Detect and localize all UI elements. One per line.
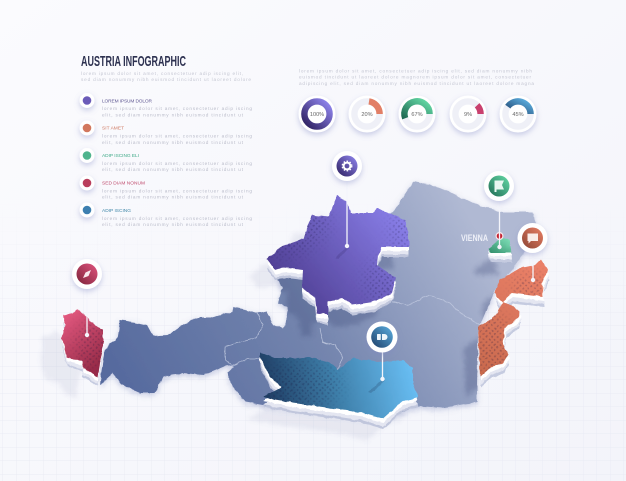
legend item: sed diam nonum: lorem ipsum dolor sit amet, consectetuer adip iscing bbox=[102, 188, 252, 193]
gauge: 100% bbox=[298, 96, 336, 132]
top paragraph: adipiscing elit, sed diam nonummy nibh euismod tincidunt ut laoreet dolore magna bbox=[299, 81, 534, 86]
gauge: 45% bbox=[500, 96, 536, 132]
internal borders bbox=[225, 295, 480, 370]
region: Carinthia bbox=[259, 352, 418, 429]
legend item: adip iscing: lorem ipsum dolor sit amet, consectetuer adip iscing bbox=[102, 216, 252, 221]
gauge: 45%: 45% bbox=[512, 112, 524, 118]
gauge: 67%: 67% bbox=[411, 112, 423, 118]
gauge: 100%: 100% bbox=[310, 112, 324, 118]
legend item: lorem ipsum dolor: lorem ipsum dolor sit amet, consectetuer adip iscing bbox=[102, 106, 252, 111]
gauge: 9%: 9% bbox=[464, 112, 472, 118]
legend item: sit amet: SIT AMET bbox=[102, 126, 124, 132]
pin: flag bbox=[484, 171, 514, 249]
pin: gear bbox=[332, 151, 362, 248]
intro text: sed diam nonummy nibh euismod tincidunt ut laoreet dolore bbox=[81, 77, 251, 82]
legend item: sit amet bbox=[80, 120, 252, 145]
region: greater Austria bbox=[100, 182, 537, 419]
intro text bbox=[81, 71, 251, 82]
gauges bbox=[298, 96, 536, 132]
legend item: adip iscing eli bbox=[80, 148, 252, 172]
pin: compass bbox=[72, 259, 102, 337]
top paragraph bbox=[299, 68, 534, 86]
region: Upper Austria bbox=[266, 195, 410, 326]
top paragraph: lorem ipsum dolor sit amet, consectetuer adip iscing elit, sed diam nonummy nibh bbox=[299, 68, 532, 73]
legend item: adip iscing: ADIP ISCING bbox=[102, 208, 131, 214]
legend item: lorem ipsum dolor: elit, sed diam nonummy nibh euismod tincidunt ut bbox=[102, 112, 244, 117]
legend item: sit amet: lorem ipsum dolor sit amet, consectetuer adip iscing bbox=[102, 134, 252, 139]
icon: flag bbox=[494, 180, 504, 192]
legend item: adip iscing eli: elit, sed diam nonummy nibh euismod tincidunt ut bbox=[102, 167, 244, 172]
icon: gear bbox=[342, 161, 352, 171]
legend item: sed diam nonum: SED DIAM NONUM bbox=[102, 180, 145, 186]
icon: compass needle bbox=[83, 270, 91, 278]
legend item: sed diam nonum: elit, sed diam nonummy nibh euismod tincidunt ut bbox=[102, 195, 244, 200]
legend item: lorem ipsum dolor: LOREM IPSUM DOLOR bbox=[102, 98, 153, 104]
map of Austria bbox=[40, 182, 555, 441]
gauge: 9% bbox=[450, 96, 486, 132]
gauge: 20% bbox=[348, 96, 386, 132]
title: AUSTRIA INFOGRAPHIC bbox=[81, 53, 186, 70]
legend bbox=[80, 93, 252, 227]
pin: film bbox=[366, 322, 398, 381]
region: Vorarlberg bbox=[61, 309, 104, 386]
legend item: sed diam nonum bbox=[80, 176, 252, 200]
legend item: sit amet: elit, sed diam nonummy nibh euismod tincidunt ut bbox=[102, 140, 244, 145]
ground long shadows bbox=[40, 214, 402, 441]
legend item: adip iscing eli: ADIP ISCING ELI bbox=[102, 153, 139, 159]
region: Vienna bbox=[488, 238, 512, 262]
intro text: lorem ipsum dolor sit amet, consectetuer adip iscing elit, bbox=[81, 71, 243, 76]
legend item: adip iscing eli: lorem ipsum dolor sit amet, consectetuer adip iscing bbox=[102, 161, 252, 166]
legend item: adip iscing bbox=[80, 202, 252, 227]
top paragraph: euismod tincidunt ut laoreet dolore magnorem ipsum dolor sit amet, consectetuer bbox=[299, 75, 531, 80]
icon: film strip bbox=[377, 334, 388, 340]
pin: Vienna marker bbox=[496, 233, 503, 239]
region: Burgenland bbox=[478, 260, 550, 388]
gauge: 20%: 20% bbox=[361, 112, 373, 118]
label: Vienna: VIENNA bbox=[461, 233, 488, 243]
pin: chat bbox=[518, 223, 548, 282]
icon: chat bubble bbox=[528, 234, 538, 244]
gauge: 67% bbox=[398, 96, 436, 132]
legend item: adip iscing: elit, sed diam nonummy nibh euismod tincidunt ut bbox=[102, 222, 244, 227]
legend item: lorem ipsum dolor bbox=[80, 93, 252, 117]
